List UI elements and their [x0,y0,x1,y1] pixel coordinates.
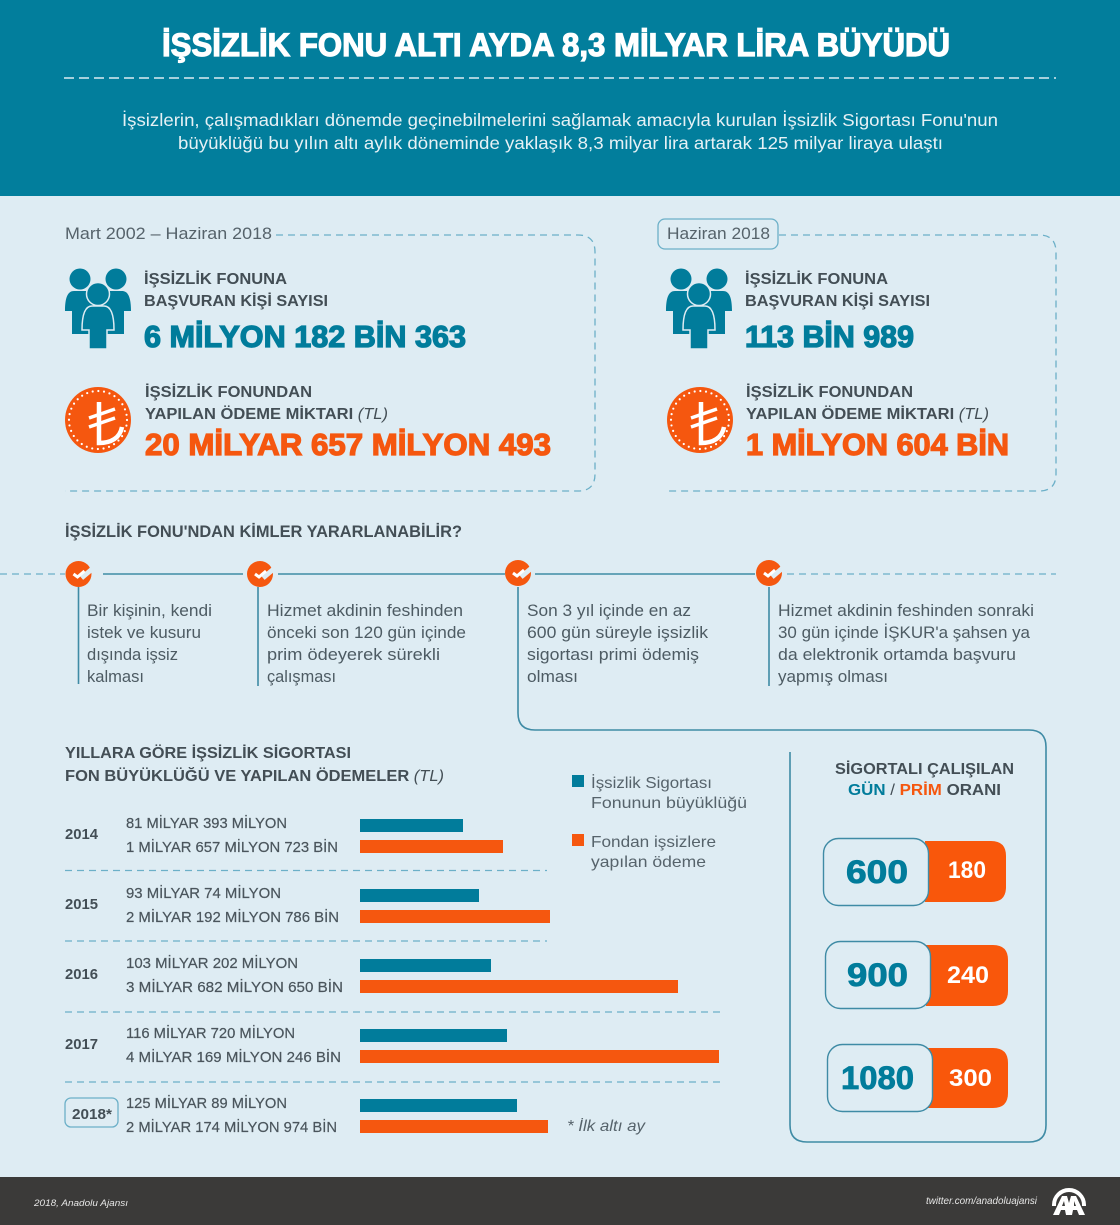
payments heading: İŞSİZLİK FONUNDAN [145,383,312,401]
heading: who can benefit: İŞSİZLİK FONU'NDAN KİMLER YARARLANABİLİR? [65,522,462,541]
chart heading: YILLARA GÖRE İŞSİZLİK SİGORTASI [65,743,351,762]
intro text [122,110,998,153]
icon: people [65,268,131,349]
row 2014 [65,814,503,856]
row 2017: 4 MİLYAR 169 MİLYON 246 BİN [126,1048,341,1066]
applicants heading: İŞSİZLİK FONUNA [745,270,888,288]
applicants number: 113 BİN 989 [745,319,914,354]
applicants heading: BAŞVURAN KİŞİ SAYISI [745,292,930,310]
intro text: İşsizlerin, çalışmadıkları dönemde geçinebilmelerini sağlamak amacıyla kurulan İşsizlik Sigortası Fonu'nun [122,110,998,130]
row 2016: 103 MİLYAR 202 MİLYON [126,954,298,972]
timeline connector [0,574,1056,1142]
period label [658,219,778,249]
payments heading: YAPILAN ÖDEME MİKTARI (TL) [746,404,989,423]
payments heading: YAPILAN ÖDEME MİKTARI (TL) [145,404,388,423]
credit: 2018, Anadolu Ajansı [33,1198,128,1209]
icon: check 3 [505,560,534,586]
applicants heading: İŞSİZLİK FONUNA [144,270,287,288]
ratio 900 / 240 [826,942,1008,1008]
condition 3: sigortası primi ödemiş [527,646,699,664]
condition 2: çalışması [267,668,336,686]
condition 4 [778,602,1034,686]
intro text: büyüklüğü bu yılın altı aylık döneminde yaklaşık 8,3 milyar lira artarak 125 milyar liraya ulaştı [178,133,943,153]
icon: check 2 [247,561,276,587]
ratio 600 / 180 [824,838,1006,906]
ratio 600 / 180: 180 [948,857,986,884]
row 2015 [65,884,550,926]
condition 1: kalması [87,668,144,686]
legend [572,773,747,871]
icon: lira coin [65,387,131,453]
row 2015: 2015 [65,897,98,913]
ratio heading [835,760,1014,799]
row 2014: 1 MİLYAR 657 MİLYON 723 BİN [126,838,338,856]
header band [0,0,1120,196]
period label: Mart 2002 – Haziran 2018 [65,225,272,243]
row 2018: 2018* [72,1107,112,1123]
row 2015: 93 MİLYAR 74 MİLYON [126,884,281,902]
condition 2: prim ödeyerek sürekli [267,646,440,664]
condition 2 [267,602,466,686]
chart heading [65,743,444,785]
ratio heading: GÜN / PRİM ORANI [848,780,1001,799]
row 2016 [65,954,678,996]
condition 2: Hizmet akdinin feshinden [267,602,463,620]
condition 4: da elektronik ortamda başvuru [778,646,1016,664]
ratio 1080 / 300: 300 [949,1065,992,1092]
ratio 1080 / 300 [828,1044,1008,1112]
icon: check 4 [756,560,785,586]
legend: yapılan ödeme [591,854,706,871]
ratio 900 / 240: 900 [847,957,908,993]
row 2018: 125 MİLYAR 89 MİLYON [126,1094,287,1112]
row 2014: 2014 [65,827,98,843]
row 2017: 116 MİLYAR 720 MİLYON [126,1024,295,1042]
ratio heading: SİGORTALI ÇALIŞILAN [835,760,1014,778]
ratio 900 / 240: 240 [947,962,989,989]
bar chart [65,814,722,1136]
panel: day / premium ratio [824,760,1014,1112]
row 2014: 81 MİLYAR 393 MİLYON [126,814,287,832]
icon: people [666,268,732,349]
condition 1: dışında işsiz [87,646,178,664]
condition 1: Bir kişinin, kendi [87,602,212,620]
applicants heading [144,270,328,310]
panel: Mart 2002 - Haziran 2018 [65,225,595,491]
title: İŞSİZLİK FONU ALTI AYDA 8,3 MİLYAR LİRA BÜYÜDÜ [162,27,950,63]
icon: AA logo [1053,1190,1085,1215]
twitter handle: twitter.com/anadoluajansi [926,1195,1038,1207]
row 2016: 3 MİLYAR 682 MİLYON 650 BİN [126,978,343,996]
ratio 1080 / 300: 1080 [841,1060,914,1096]
footer [0,1177,1120,1225]
panel: Haziran 2018 [658,219,1056,491]
period label: Haziran 2018 [667,225,770,243]
condition 3 [527,602,709,686]
icon: lira coin [667,387,733,453]
payments heading: İŞSİZLİK FONUNDAN [746,383,913,401]
payments number: 1 MİLYON 604 BİN [746,427,1009,462]
condition 4: Hizmet akdinin feshinden sonraki [778,602,1034,620]
condition 3: 600 gün süreyle işsizlik [527,624,709,642]
ratio 600 / 180: 600 [846,854,908,890]
legend: İşsizlik Sigortası [591,773,712,792]
row 2016: 2016 [65,967,98,983]
row 2015: 2 MİLYAR 192 MİLYON 786 BİN [126,908,339,926]
condition 3: olması [527,668,578,686]
applicants number: 6 MİLYON 182 BİN 363 [144,319,466,354]
applicants heading [745,270,930,310]
legend: Fondan işsizlere [591,834,716,851]
condition 2: önceki son 120 gün içinde [267,624,466,642]
condition 4: yapmış olması [778,668,888,686]
chart heading: FON BÜYÜKLÜĞÜ VE YAPILAN ÖDEMELER (TL) [65,766,444,785]
row 2018: 2 MİLYAR 174 MİLYON 974 BİN [126,1118,337,1136]
row 2017: 2017 [65,1037,98,1053]
condition 3: Son 3 yıl içinde en az [527,602,691,620]
applicants heading: BAŞVURAN KİŞİ SAYISI [144,292,328,310]
icon: check 1 [66,561,94,587]
legend: Fonunun büyüklüğü [591,795,747,812]
row 2018 [65,1094,548,1136]
condition 1 [87,602,212,686]
row 2017 [65,1024,719,1066]
footnote: * İlk altı ay [567,1116,646,1135]
payments heading [145,383,388,423]
condition 1: istek ve kusuru [87,624,201,642]
condition 4: 30 gün içinde İŞKUR'a şahsen ya [778,623,1031,642]
payments number: 20 MİLYAR 657 MİLYON 493 [145,427,551,462]
payments heading [746,383,989,423]
